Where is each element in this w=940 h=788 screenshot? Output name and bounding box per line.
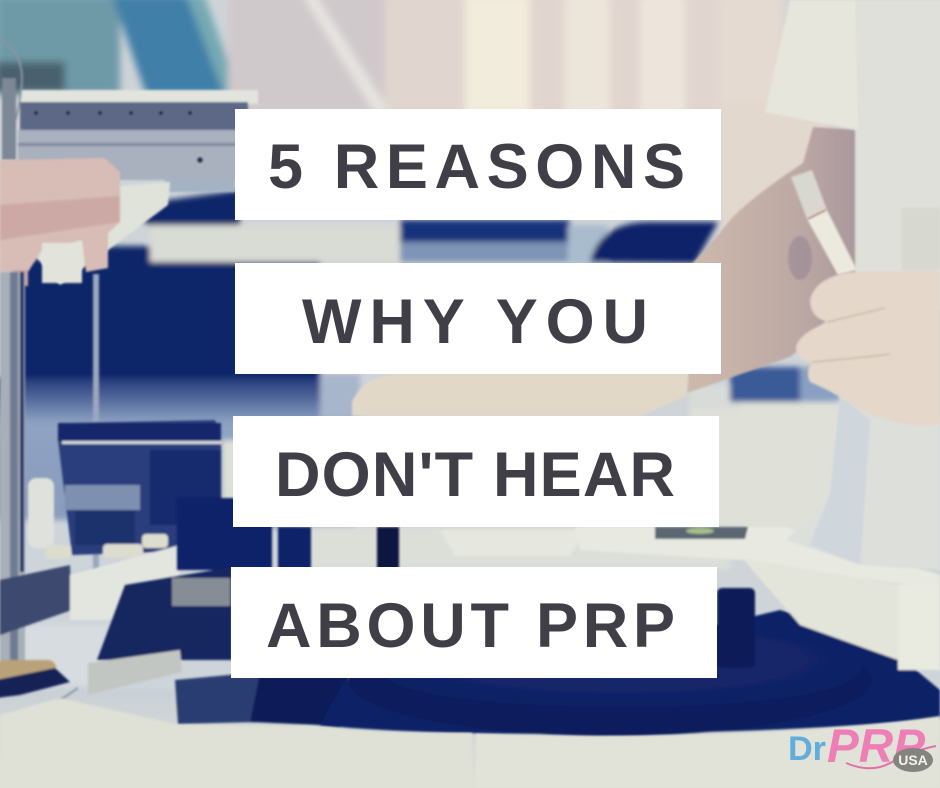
front table panels <box>0 698 940 788</box>
centrifuge bowl <box>320 527 940 736</box>
arm holding a tube <box>687 127 870 393</box>
logo: Dr PRP USA <box>788 719 936 772</box>
background top: blurred wall and curtains <box>0 0 830 270</box>
title strip 1: 5 REASONS <box>268 132 685 202</box>
title strip 2 <box>235 263 721 374</box>
white title strips <box>231 109 721 678</box>
black instrument block <box>28 498 399 726</box>
left machine: pink dispenser head <box>0 158 120 286</box>
background lower: table and white surfaces <box>0 367 940 788</box>
title strip 4: ABOUT PRP <box>266 591 675 661</box>
logo: Dr PRP USA: USA <box>898 752 928 768</box>
left machine: shelf rail with holes <box>0 40 258 285</box>
doctor's white coat <box>765 0 940 570</box>
left machine: metal pole and needle <box>0 272 99 698</box>
title strip 4 <box>231 567 717 678</box>
logo: Dr PRP USA: PRP <box>827 719 926 772</box>
logo: Dr PRP USA: Dr <box>788 730 826 768</box>
background middle: dark navy machinery <box>0 190 718 528</box>
title strip 1 <box>235 109 721 220</box>
gloved hand holding tube <box>796 272 940 425</box>
test tube <box>791 170 857 275</box>
title strip 3 <box>233 416 719 527</box>
lower gloved hand <box>352 374 688 416</box>
title strip 2: WHY YOU <box>302 287 648 357</box>
title strip 3: DON'T HEAR <box>275 440 675 510</box>
glass box <box>0 420 222 635</box>
